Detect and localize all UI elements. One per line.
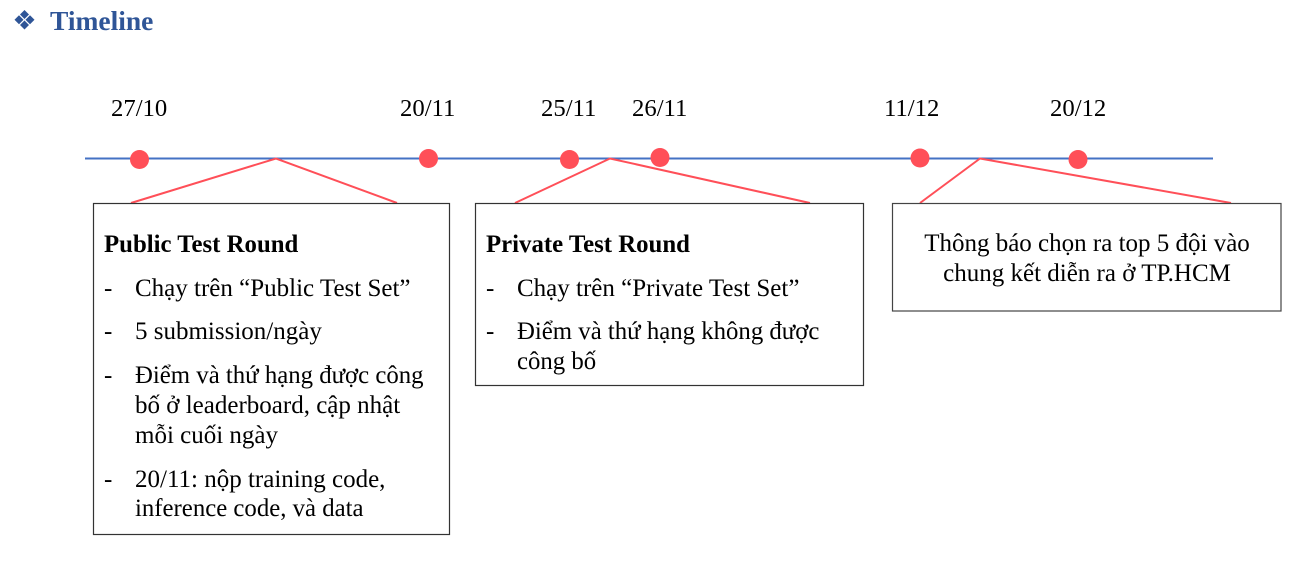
date labels: 27/10 (111, 95, 167, 122)
panel: public test round: mỗi cuối ngày (135, 422, 279, 449)
milestone markers (130, 148, 1088, 169)
date labels (111, 95, 1106, 122)
panel: public test round: Chạy trên “Public Test Set” (135, 275, 411, 302)
panel: public test round: inference code, và data (135, 495, 364, 522)
panel: final announcement (892, 204, 1281, 311)
date labels: 20/12 (1050, 95, 1106, 122)
date labels: 25/11 (541, 95, 596, 122)
panel: public test round: 20/11: nộp training code, (135, 466, 385, 493)
title text: Timeline (50, 5, 153, 36)
date labels: 26/11 (632, 95, 687, 122)
title (14, 5, 153, 36)
panel: private test round (476, 204, 864, 386)
panel: public test round: - (104, 466, 112, 493)
date labels: 20/11 (400, 95, 455, 122)
panel: private test round: Private Test Round (486, 231, 690, 258)
connector lines (131, 158, 1231, 203)
panel: public test round: - (104, 275, 112, 302)
panel: public test round: Điểm và thứ hạng được công (135, 362, 424, 389)
panel: private test round: Chạy trên “Private Test Set” (517, 275, 799, 302)
panel: public test round: Public Test Round (104, 231, 299, 258)
panel: public test round (94, 204, 450, 534)
panel: final announcement: chung kết diễn ra ở TP.HCM (943, 260, 1231, 287)
panel: private test round: - (486, 318, 494, 345)
panel: public test round: bố ở leaderboard, cập nhật (135, 392, 400, 419)
timeline axis (85, 158, 1213, 160)
panel: private test round: - (486, 275, 494, 302)
panel: public test round: - (104, 362, 112, 389)
panel: public test round: 5 submission/ngày (135, 318, 322, 345)
panel: private test round: công bố (517, 348, 597, 375)
panel: public test round: - (104, 318, 112, 345)
icon: diamond bullet (14, 10, 34, 30)
date labels: 11/12 (884, 95, 939, 122)
panel: final announcement: Thông báo chọn ra top 5 đội vào (924, 230, 1250, 257)
panel: private test round: Điểm và thứ hạng không được (517, 318, 819, 345)
